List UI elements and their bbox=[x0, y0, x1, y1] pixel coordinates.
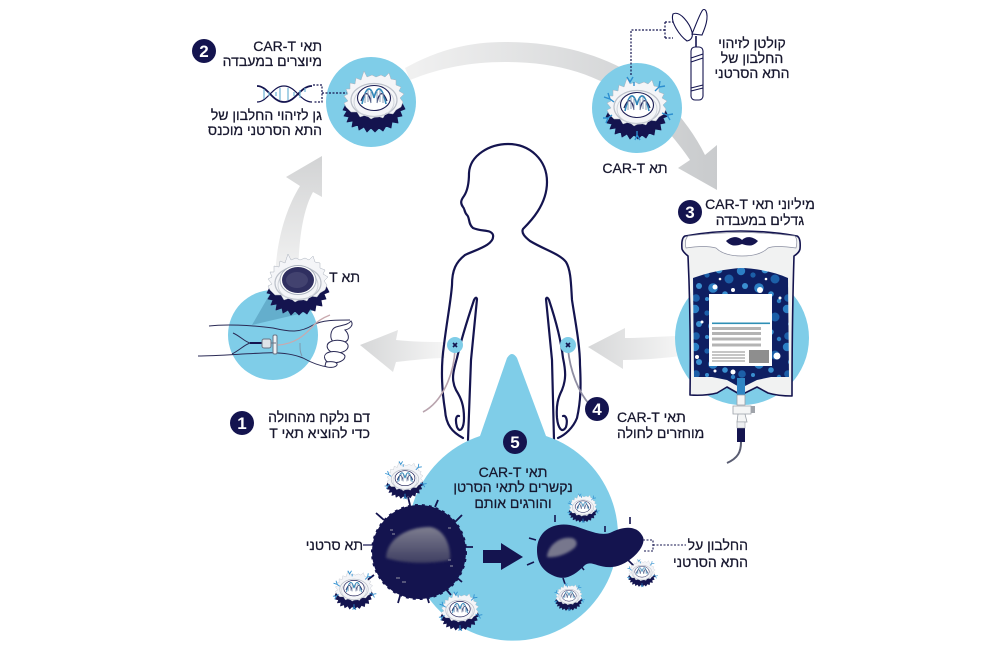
CAR-T cell attached, top bbox=[385, 461, 427, 499]
step 5 badge: 5 bbox=[510, 433, 520, 452]
step 5 text: נקשרים לתאי הסרטן bbox=[453, 479, 573, 495]
CAR-T cell attached, bottom bbox=[439, 592, 482, 631]
step 1 text: כדי להוציא תאי T bbox=[269, 425, 370, 441]
label: cancer cell: תא סרטני bbox=[306, 537, 363, 553]
step 5 text bbox=[453, 464, 573, 511]
step 2 heading bbox=[223, 38, 322, 69]
arm and catheter bbox=[198, 320, 350, 367]
step 4 text: תאי CAR-T bbox=[617, 409, 686, 425]
step 2 circle with cell bbox=[326, 57, 416, 147]
step 4 text bbox=[617, 409, 704, 441]
arrow: step 2 to step 3 bbox=[405, 42, 717, 190]
CAR-T cell, far right bbox=[627, 559, 658, 587]
step 2 heading: מיוצרים במעבדה bbox=[223, 53, 322, 69]
receptor text bbox=[715, 35, 789, 81]
label: cancer protein bbox=[643, 537, 748, 570]
connector and tube bbox=[733, 395, 751, 422]
arrow: bag to patient bbox=[588, 328, 680, 369]
receptor text: התא הסרטני bbox=[715, 65, 789, 81]
step 4 badge bbox=[585, 397, 609, 421]
fist bbox=[325, 321, 352, 367]
step 2 badge bbox=[192, 39, 216, 63]
receptor dotted leader bbox=[631, 22, 673, 75]
patient body outline bbox=[442, 144, 581, 440]
large cancer cell bbox=[366, 497, 473, 603]
gene text bbox=[208, 107, 322, 138]
label: cancer protein: התא הסרטני bbox=[673, 554, 748, 570]
step 2 badge: 2 bbox=[199, 42, 209, 61]
dying cancer cell bbox=[527, 515, 644, 584]
step 2 heading: תאי CAR-T bbox=[253, 38, 322, 54]
step 5 text: והורגים אותם bbox=[474, 495, 552, 511]
step 3 heading bbox=[705, 196, 815, 228]
step 5: blue drop panel bbox=[408, 354, 618, 641]
CAR-T cell, upper right bbox=[567, 494, 600, 523]
liquid with cells bbox=[693, 268, 789, 388]
step 3 heading: גדלים במעבדה bbox=[716, 212, 804, 228]
arrow: cancer cell shrinking bbox=[483, 543, 523, 570]
step 1 text bbox=[268, 409, 370, 441]
CAR-T cell circle bbox=[592, 63, 682, 153]
receptor text: החלבון של bbox=[721, 50, 783, 66]
gene text: גן לזיהוי החלבון של bbox=[211, 107, 322, 123]
step 4 badge: 4 bbox=[592, 400, 602, 419]
beam from T cell bbox=[252, 292, 316, 325]
step 1: blood draw bbox=[198, 290, 352, 380]
right arm infusion site and tube bbox=[560, 337, 590, 405]
left arm infusion site and tube bbox=[423, 337, 463, 412]
step 5 text: תאי CAR-T bbox=[479, 464, 547, 480]
label: CAR-T cell: תא CAR-T bbox=[602, 160, 668, 176]
step 1 badge bbox=[230, 411, 254, 435]
gene text: התא הסרטני מוכנס bbox=[208, 122, 322, 138]
label: cancer protein: החלבון על bbox=[688, 537, 748, 553]
label on bag bbox=[709, 294, 772, 366]
port bbox=[737, 378, 745, 395]
step 1 badge: 1 bbox=[237, 414, 247, 433]
bag hanger bbox=[726, 237, 758, 246]
step 1 text: דם נלקח מהחולה bbox=[268, 409, 370, 425]
receptor text: קולטן לזיהוי bbox=[718, 35, 786, 51]
step 3 heading: מיליוני תאי CAR-T bbox=[705, 196, 815, 212]
step 5 badge bbox=[503, 430, 527, 454]
step 3 badge: 3 bbox=[685, 203, 695, 222]
step 4 text: מוחזרים לחולה bbox=[617, 425, 704, 441]
label: T cell: תא T bbox=[329, 269, 360, 285]
CAR-T cell attached, left bbox=[333, 571, 376, 610]
CAR-T cell, lower bbox=[554, 583, 585, 611]
bag body bbox=[682, 231, 800, 396]
step 3: infusion bag bbox=[675, 231, 809, 463]
arrow: patient to step 1 bbox=[360, 330, 445, 372]
icon: DNA gene bbox=[257, 85, 347, 102]
white bubbles bbox=[695, 284, 782, 374]
T cell bbox=[267, 254, 329, 315]
step 3 badge bbox=[678, 200, 702, 224]
bag top panel bbox=[685, 232, 797, 256]
arrow: step 1 to step 2 bbox=[275, 156, 322, 285]
icon: CAR receptor bbox=[672, 10, 707, 100]
